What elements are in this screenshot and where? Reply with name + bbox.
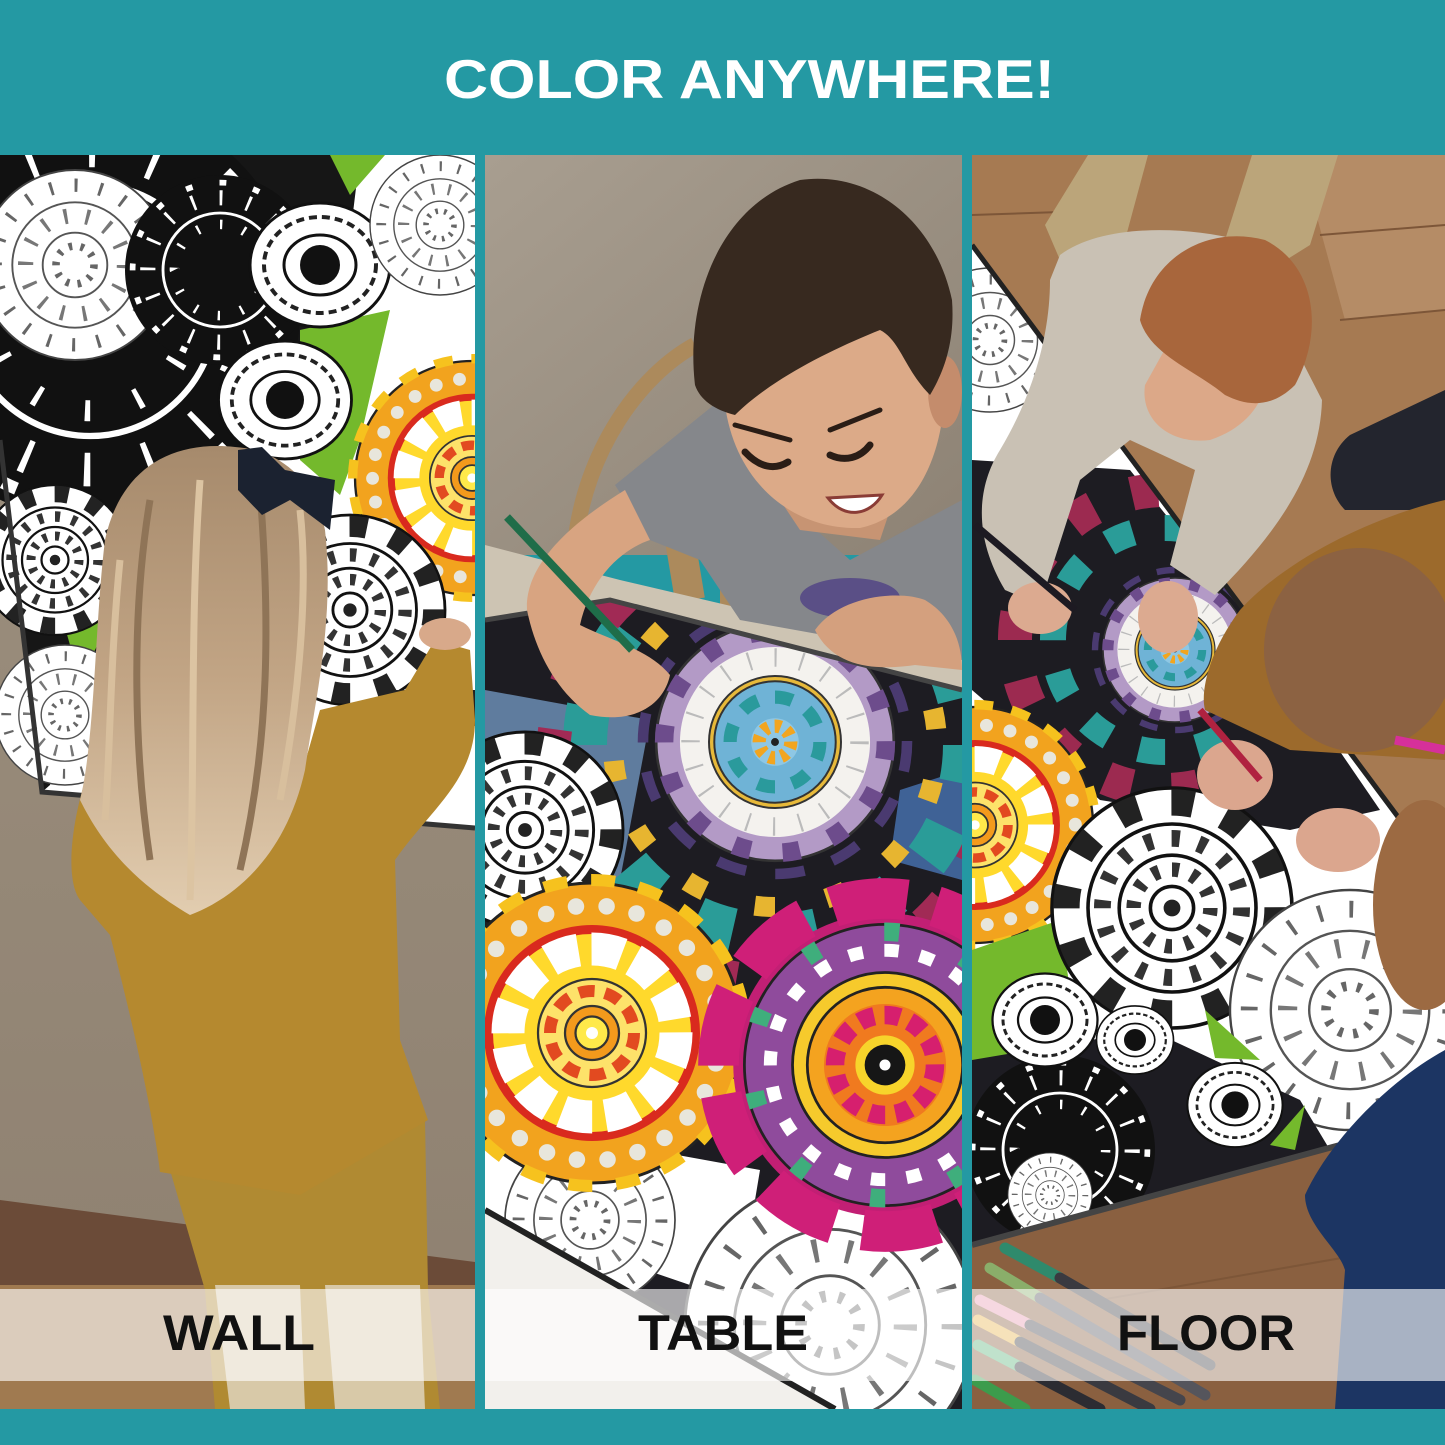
colored markers [975, 1248, 1210, 1409]
legs [1045, 155, 1148, 260]
hair [693, 179, 953, 415]
panel: floor [972, 155, 1445, 1409]
navy shirt [1305, 1050, 1445, 1409]
boy lying down [975, 155, 1338, 653]
label band: table [485, 1289, 962, 1381]
wood floor [972, 155, 1445, 1409]
right hand [815, 595, 962, 670]
t-shirt [615, 400, 962, 660]
pants [170, 1120, 440, 1409]
baseboard and floor [0, 1200, 475, 1409]
red marker [1200, 710, 1260, 780]
face [1144, 340, 1265, 441]
neck [784, 506, 888, 540]
hair [1264, 548, 1445, 752]
jacket [1204, 500, 1445, 760]
poster artwork [427, 538, 1052, 1445]
title: COLOR ANYWHERE! [444, 48, 1055, 110]
label band: wall: WALL [163, 1305, 315, 1361]
eyes [735, 410, 880, 467]
poster artwork [855, 268, 1445, 1245]
floor poster [972, 244, 1445, 1248]
table top [485, 545, 962, 700]
hands [1008, 582, 1072, 634]
girl [71, 446, 475, 1409]
hand with marker [1197, 740, 1273, 810]
arm with hand [527, 490, 670, 717]
hair [1373, 800, 1445, 1010]
smile [828, 495, 882, 512]
table poster [485, 598, 962, 1409]
socks [215, 1285, 305, 1409]
label band: floor: FLOOR [1117, 1305, 1295, 1361]
panel: wall [0, 155, 475, 1409]
wall background [0, 500, 475, 1262]
third child [1296, 800, 1445, 1409]
purple marker [975, 525, 1075, 610]
second boy [1197, 500, 1445, 810]
hair bow [238, 447, 335, 530]
face [726, 330, 941, 528]
ear [928, 356, 962, 428]
right hand [1138, 581, 1198, 653]
boy at table [507, 179, 962, 717]
room wall [485, 155, 962, 555]
hair [80, 446, 328, 915]
chair [575, 345, 730, 610]
pink marker [1395, 740, 1445, 750]
hair [1140, 236, 1312, 403]
sweater [71, 640, 475, 1195]
label band: wall [0, 1289, 475, 1381]
panel: table [485, 155, 962, 1409]
dark pants of child at top right [1331, 390, 1445, 510]
sweater [982, 230, 1322, 605]
label band: floor [972, 1289, 1445, 1381]
label band: table: TABLE [638, 1305, 808, 1361]
shirt print [800, 578, 900, 618]
hair streaks [105, 480, 303, 900]
pencil [507, 517, 632, 650]
wall poster [0, 155, 475, 830]
hand [419, 618, 471, 650]
lower hand [1296, 808, 1380, 872]
